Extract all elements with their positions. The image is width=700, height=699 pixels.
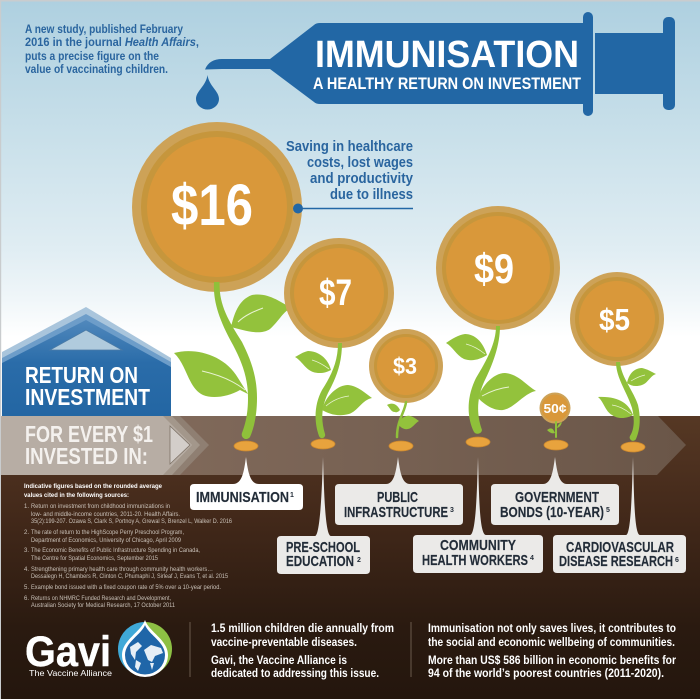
plant: community health workers $9: $9 (474, 245, 514, 292)
plant: cardiovascular disease research $5: $5 (599, 302, 630, 337)
plant: immunisation $16 (132, 122, 302, 439)
soil background (1, 416, 700, 699)
sources notes: low- and middle-income countries, 2011-20. Health Affairs. (31, 512, 180, 518)
plant: pre-school education $7 (284, 238, 394, 438)
plant: cardiovascular disease research $5 (570, 272, 664, 441)
callout: saving in healthcare: costs, lost wages (307, 154, 413, 171)
icon: Gavi drop logo (118, 620, 172, 677)
label: pre-school education (277, 457, 370, 574)
title: IMMUNISATION (315, 34, 579, 76)
plant: public infrastructure $3 (369, 329, 443, 437)
callout: saving in healthcare: and productivity (310, 170, 414, 187)
plant: pre-school education $7: $7 (319, 272, 352, 313)
sources notes: 1. (24, 504, 29, 510)
sky background (0, 0, 700, 416)
footer dividers (190, 622, 411, 677)
for every $1 panel: FOR EVERY $1 (25, 421, 153, 447)
for every $1 panel: INVESTED IN: (25, 443, 148, 469)
label: government bonds: 5 (606, 507, 610, 514)
ground arrow band (170, 416, 686, 475)
footer text: column 1: vaccine-preventable diseases. (211, 635, 357, 649)
plant: government bonds 50c: 50¢ (544, 401, 566, 416)
label: government bonds (491, 457, 619, 525)
label: public infrastructure (335, 457, 463, 525)
footer text: column 1: 1.5 million children die annually from (211, 621, 394, 635)
footer text: column 1: Gavi, the Vaccine Alliance is (211, 653, 347, 667)
label: cardiovascular disease research (553, 457, 686, 573)
return on investment house panel: RETURN ON (25, 362, 138, 388)
label: pre-school education: EDUCATION (286, 553, 354, 570)
label: public infrastructure: 3 (450, 507, 454, 514)
sources notes: values cited in the following sources: (24, 492, 129, 499)
intro text: puts a precise figure on the (25, 51, 159, 63)
label: immunisation (190, 457, 303, 510)
sources notes: Return on investment from childhood immunizations in (31, 504, 170, 510)
plant: public infrastructure $3: $3 (393, 353, 417, 379)
sources notes: 5. (24, 585, 29, 591)
sources notes (24, 483, 233, 609)
sources notes: The rate of return to the HighScope Perry Preschool Program, (31, 530, 184, 536)
sources notes: Indicative figures based on the rounded average (24, 483, 162, 490)
footer text: column 2: 94 of the world’s poorest countries (2011-2020). (428, 666, 664, 680)
sources notes: 2. (24, 530, 29, 536)
label: government bonds: BONDS (10-YEAR) (500, 504, 604, 521)
icon: syringe (196, 12, 675, 116)
label: immunisation: IMMUNISATION (196, 489, 289, 506)
sources notes: Strengthening primary health care through community health workers… (31, 567, 213, 573)
intro text (25, 24, 199, 76)
intro text: A new study, published February (25, 24, 184, 36)
intro text: value of vaccinating children. (25, 64, 168, 76)
callout: saving in healthcare: Saving in healthcare (286, 138, 413, 155)
plant: community health workers $9 (436, 206, 560, 434)
callout: saving in healthcare (286, 138, 414, 214)
plant: government bonds 50c (540, 392, 570, 437)
label: public infrastructure: INFRASTRUCTURE (344, 504, 448, 521)
sources notes: Example bond issued with a fixed coupon rate of 5% over a 10-year period. (31, 585, 221, 591)
label: community health workers: COMMUNITY (440, 537, 516, 554)
return on investment house panel (2, 307, 171, 416)
footer text: column 1 (211, 621, 394, 680)
sources notes: 3. (24, 548, 29, 554)
sources notes: 35(2):199-207. Ozawa S, Clark S, Portnoy A, Grewal S, Brenzel L, Walker D. 2016 (31, 519, 233, 525)
label: pre-school education: 2 (357, 557, 361, 564)
footer text: column 1: dedicated to addressing this issue. (211, 666, 379, 680)
sources notes: Returns on NHMRC Funded Research and Development, (31, 596, 171, 602)
label: community health workers (413, 457, 543, 573)
sources notes: Department of Economics, University of Chicago, April 2009 (31, 538, 182, 544)
sources notes: 4. (24, 567, 29, 573)
label: immunisation: 1 (290, 492, 294, 499)
sources notes: Australian Society for Medical Research, 17 October 2011 (31, 603, 176, 609)
syringe title banner (196, 12, 675, 116)
return on investment house panel: INVESTMENT (25, 384, 150, 410)
label: community health workers: 4 (530, 555, 534, 562)
Gavi wordmark: Gavi (25, 628, 111, 676)
label: cardiovascular disease research: 6 (675, 557, 679, 564)
callout: saving in healthcare: due to illness (330, 186, 413, 203)
label: government bonds: GOVERNMENT (515, 489, 599, 506)
label: pre-school education: PRE-SCHOOL (286, 539, 360, 556)
plant: immunisation $16: $16 (171, 173, 253, 238)
intro text: 2016 in the journal Health Affairs, (25, 37, 199, 49)
Gavi wordmark: The Vaccine Alliance (29, 668, 112, 678)
ground coins (234, 437, 645, 452)
subtitle: A HEALTHY RETURN ON INVESTMENT (313, 75, 581, 93)
for every $1 panel (1, 416, 209, 475)
sources notes: The Centre for Spatial Economics, September 2015 (31, 556, 159, 562)
label: community health workers: HEALTH WORKERS (422, 552, 528, 569)
sources notes: Dessalegn H, Chambers R, Clinton C, Phumaphi J, Sirleaf J, Evans T, et al. 2015 (31, 574, 229, 580)
label: public infrastructure: PUBLIC (377, 489, 418, 506)
sources notes: 6. (24, 596, 29, 602)
sources notes: The Economic Benefits of Public Infrastructure Spending in Canada, (31, 548, 200, 554)
footer text: column 2 (428, 621, 676, 680)
